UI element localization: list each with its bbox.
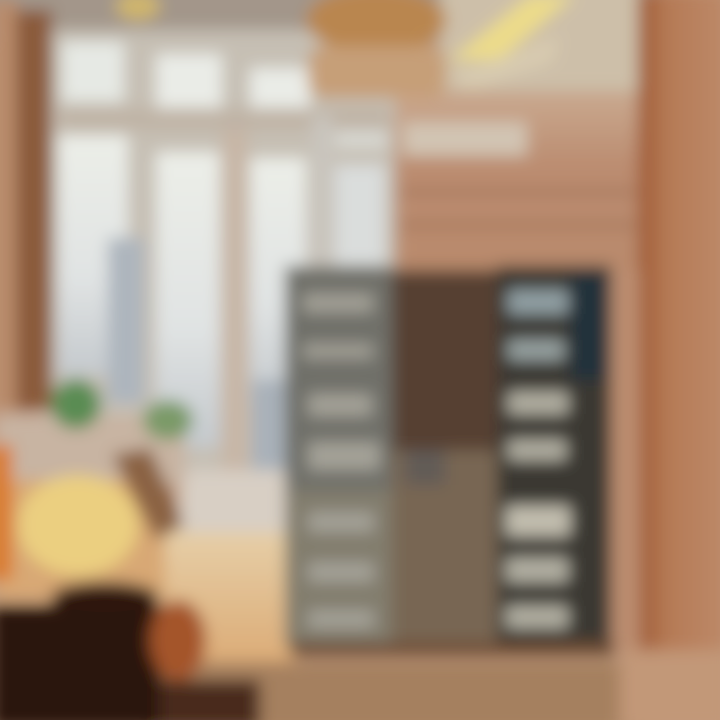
cabinet left section — [285, 266, 393, 646]
plants — [51, 379, 193, 440]
right shelves — [506, 290, 570, 628]
floor — [150, 470, 720, 720]
table lamp — [0, 445, 184, 580]
ceiling — [0, 0, 660, 92]
right column — [638, 0, 720, 670]
window panes upper — [62, 42, 124, 102]
sofa and back wall lower left — [0, 415, 185, 600]
wood wall panel — [395, 95, 645, 275]
cabinet — [285, 266, 615, 656]
window wall — [45, 30, 395, 480]
left shelves — [303, 294, 380, 628]
window mullions — [222, 130, 248, 475]
cabinet middle section — [392, 270, 500, 450]
ceiling pendant lamp — [306, 0, 446, 98]
orange chair — [150, 600, 260, 720]
left wall column — [0, 0, 52, 410]
window panes lower — [58, 135, 128, 375]
cabinet base shadow — [290, 642, 615, 656]
cabinet right section — [497, 266, 611, 646]
wall beside cabinet — [608, 270, 640, 650]
dark foreground table — [0, 582, 162, 720]
distant tower — [108, 238, 144, 403]
ceiling light strip — [116, 0, 575, 90]
